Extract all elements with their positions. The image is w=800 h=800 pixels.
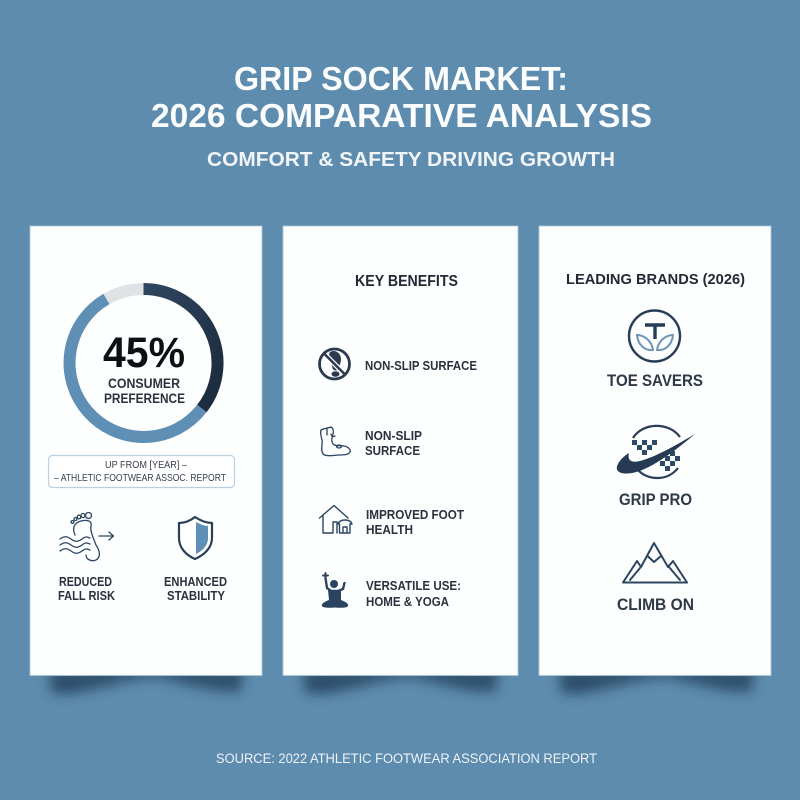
label: enhanced stability: ENHANCED (164, 575, 227, 589)
icon: house (320, 506, 352, 533)
label: reduced fall risk (58, 575, 115, 603)
subtitle: COMFORT & SAFETY DRIVING GROWTH (207, 148, 615, 171)
icon: yoga figure (322, 573, 348, 608)
label: reduced fall risk: FALL RISK (58, 589, 115, 603)
panel: market share (30, 226, 262, 676)
label: non-slip surface two lines: SURFACE (365, 444, 420, 458)
icon: shield (179, 517, 212, 559)
title (151, 60, 652, 134)
card shadows (50, 670, 754, 694)
icon: climb on mountain (623, 543, 687, 582)
icon: foot outline (321, 427, 350, 456)
label: improved foot health: HEALTH (366, 523, 413, 537)
donut chart: 45% consumer preference (70, 289, 218, 437)
label: improved foot health (366, 508, 464, 537)
icon: no-slip foot (320, 349, 350, 379)
label: versatile use (366, 579, 461, 609)
panel: leading brands (539, 226, 771, 676)
callout: – ATHLETIC FOOTWEAR ASSOC. REPORT (54, 472, 226, 484)
title: 2026 COMPARATIVE ANALYSIS (151, 97, 652, 134)
label: grip pro: GRIP PRO (619, 490, 692, 509)
donut value: 45% (103, 329, 185, 377)
label: versatile use: HOME & YOGA (366, 595, 449, 609)
title: GRIP SOCK MARKET: (234, 60, 568, 97)
panel: key benefits (283, 226, 518, 676)
label: climb on: CLIMB ON (617, 595, 694, 614)
icon: grip pro logo (617, 426, 695, 478)
donut label (104, 376, 185, 406)
heading: leading brands: LEADING BRANDS (2026) (566, 271, 745, 288)
label: non-slip surface: NON-SLIP SURFACE (365, 359, 477, 373)
label: versatile use: VERSATILE USE: (366, 579, 461, 593)
icon: toe savers logo (629, 310, 680, 362)
source: SOURCE: 2022 ATHLETIC FOOTWEAR ASSOCIATION REPORT (216, 751, 597, 766)
heading: key benefits: KEY BENEFITS (355, 273, 458, 290)
callout (48, 456, 234, 488)
label: toe savers: TOE SAVERS (607, 371, 703, 390)
label: enhanced stability: STABILITY (167, 589, 226, 603)
donut label: CONSUMER (108, 376, 180, 391)
label: non-slip surface two lines (365, 429, 422, 458)
label: improved foot health: IMPROVED FOOT (366, 508, 464, 522)
donut label: PREFERENCE (104, 391, 185, 406)
icon: foot with waves and arrow (60, 512, 114, 561)
callout: UP FROM [YEAR] – (105, 459, 187, 471)
label: reduced fall risk: REDUCED (59, 575, 112, 589)
label: enhanced stability (164, 575, 227, 603)
label: non-slip surface two lines: NON-SLIP (365, 429, 422, 443)
